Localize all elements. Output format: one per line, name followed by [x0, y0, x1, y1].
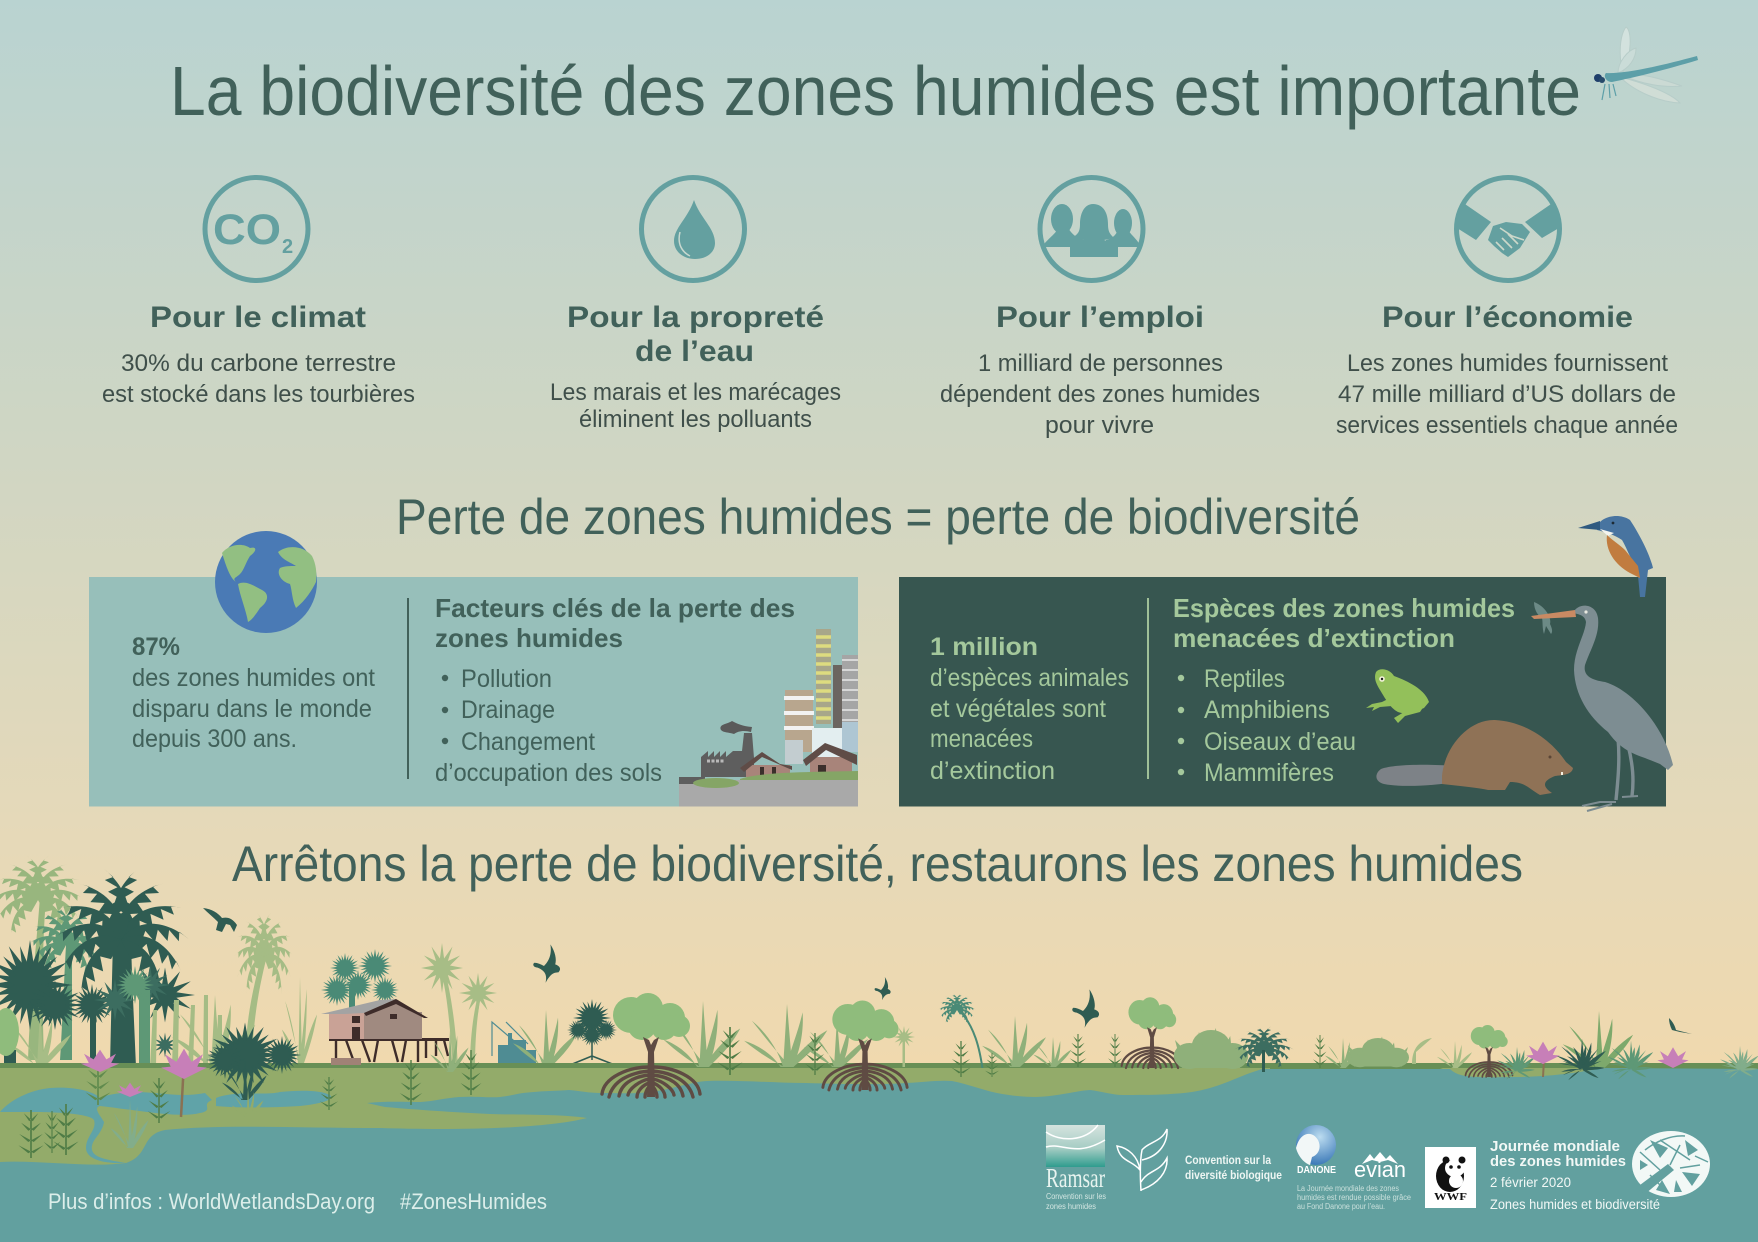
title: La biodiversité des zones humides est importante [170, 52, 1581, 130]
bullet list: Pollution [461, 665, 552, 693]
illustration: wetland landscape [0, 853, 1758, 1242]
panel: threatened species [899, 516, 1673, 811]
horizon plants, foreground [717, 1011, 1758, 1083]
text block: 30% du carbone terrestre [121, 350, 396, 377]
World Wetlands Day label: 2 février 2020 [1490, 1175, 1571, 1190]
bullet list: d’occupation des sols [435, 759, 662, 787]
statistic: des zones humides ont [132, 664, 375, 692]
bullet list: Mammifères [1204, 759, 1334, 787]
icon: CO2: CO [213, 206, 281, 254]
icon: water drop [642, 178, 744, 280]
far bushes and boat [492, 997, 620, 1067]
logo: Danone and evian: evian [1354, 1157, 1406, 1182]
tall palm trees, left [0, 853, 255, 1080]
far-left tree [0, 1008, 32, 1095]
heading: menacées d’extinction [1173, 623, 1455, 653]
footer link: Plus d’infos : WorldWetlandsDay.org [48, 1189, 375, 1214]
logo: Danone and evian: DANONE [1297, 1165, 1336, 1176]
flying birds [203, 908, 1692, 1034]
text block: Les marais et les marécages [550, 379, 841, 406]
panel: climate [102, 178, 415, 408]
text block [940, 350, 1260, 439]
logo: Ramsar: zones humides [1046, 1201, 1096, 1211]
World Wetlands Day label [1490, 1138, 1660, 1212]
World Wetlands Day label: des zones humides [1490, 1153, 1626, 1170]
text block: 47 mille milliard d’US dollars de [1338, 381, 1676, 408]
second land spit [1440, 1068, 1620, 1082]
statistic [132, 633, 375, 753]
heading [567, 301, 824, 368]
text block [102, 350, 415, 408]
World Wetlands Day label: Journée mondiale [1490, 1138, 1620, 1155]
icon: CO2 [205, 178, 308, 280]
heading: Facteurs clés de la perte des [435, 593, 795, 623]
heading: Pour la propreté [567, 301, 824, 334]
bullet list: Drainage [461, 696, 555, 724]
text: CBD: Convention sur la [1185, 1153, 1271, 1167]
divider [1147, 598, 1149, 779]
logo: Danone and evian: humides est rendue possible grâce [1297, 1193, 1412, 1202]
fan palms behind house [282, 947, 400, 1067]
icon: handshake [1456, 178, 1560, 280]
logo: Ramsar: Convention sur les [1046, 1191, 1106, 1201]
icon: CO2: 2 [282, 236, 293, 258]
text block [550, 379, 841, 433]
stilt house [321, 999, 449, 1065]
statistic: depuis 300 ans. [132, 725, 297, 753]
text block [1336, 350, 1678, 439]
text block: est stocké dans les tourbières [102, 381, 415, 408]
statistic: d’extinction [930, 757, 1055, 785]
divider [407, 598, 409, 779]
heading: zones humides [435, 623, 623, 653]
logo: Ramsar [1046, 1125, 1106, 1211]
left lagoon and stream [0, 1088, 212, 1163]
heading [435, 593, 795, 653]
horizon plants, centre [663, 992, 1072, 1072]
bullet list: Changement [461, 728, 595, 756]
logo: WWF: WWF [1434, 1191, 1467, 1203]
statistic: et végétales sont [930, 695, 1106, 723]
panel: key factors [89, 531, 858, 806]
heading: de l’eau [635, 335, 754, 368]
heading: Pour l’emploi [996, 301, 1204, 334]
statistic: 87% [132, 633, 180, 661]
illustration: city and factory [679, 629, 858, 806]
icon: people [1040, 178, 1143, 280]
horizon band [0, 1063, 1758, 1070]
statistic: disparu dans le monde [132, 695, 372, 723]
statistic: 1 million [930, 633, 1038, 661]
bullet list [1178, 665, 1356, 787]
mid lagoon [216, 1091, 331, 1108]
logo: Danone and evian: La Journée mondiale des zones [1297, 1184, 1399, 1193]
heading: wetland loss: Perte de zones humides = perte de biodiversité [396, 489, 1360, 545]
statistic [930, 633, 1129, 785]
logo: WWF [1425, 1147, 1476, 1208]
bullet list: Oiseaux d’eau [1204, 728, 1356, 756]
text block: éliminent les polluants [579, 406, 812, 433]
illustration: heron with fish [1531, 602, 1673, 811]
logo: Danone and evian [1296, 1125, 1412, 1211]
panel: clean water [550, 178, 841, 433]
illustration: beaver [1376, 720, 1573, 795]
hashtag: #ZonesHumides [400, 1189, 547, 1214]
text block: services essentiels chaque année [1336, 412, 1678, 439]
heading: Espèces des zones humides [1173, 593, 1515, 623]
panel: jobs [940, 178, 1260, 439]
logo: Danone and evian: au Fond Danone pour l’eau. [1297, 1202, 1385, 1211]
mangrove trees [602, 993, 1513, 1097]
heading: call to action: Arrêtons la perte de biodiversité, restaurons les zones humides [232, 836, 1523, 892]
heading: Pour l’économie [1382, 301, 1633, 334]
statistic: d’espèces animales [930, 664, 1129, 692]
bullet list: Reptiles [1204, 665, 1285, 693]
emblem [1632, 1131, 1710, 1197]
illustration: frog [1366, 669, 1429, 723]
illustration: kingfisher [1578, 516, 1653, 597]
land [0, 1068, 1270, 1180]
text block: 1 milliard de personnes [978, 350, 1223, 377]
logo: CBD leaves [1117, 1129, 1167, 1191]
coconut palm [234, 910, 294, 1067]
dark bush and foreground, left [18, 1019, 482, 1158]
star palms [421, 943, 497, 1067]
text block: pour vivre [1045, 412, 1154, 439]
text block: dépendent des zones humides [940, 381, 1260, 408]
bullet list [435, 665, 662, 787]
panel: economy [1336, 178, 1678, 439]
statistic: menacées [930, 725, 1033, 753]
heading: Pour le climat [150, 301, 366, 334]
logo: Ramsar: Ramsar [1046, 1163, 1105, 1193]
bullet list: Amphibiens [1204, 696, 1330, 724]
heading [1173, 593, 1515, 653]
bamboo [150, 995, 222, 1067]
World Wetlands Day label: Zones humides et biodiversité [1490, 1197, 1660, 1212]
text: CBD: diversité biologique [1185, 1168, 1282, 1182]
text: CBD [1185, 1153, 1282, 1182]
icon: dragonfly [1594, 27, 1698, 103]
text block: Les zones humides fournissent [1347, 350, 1668, 377]
icon: globe [215, 531, 317, 633]
water [0, 1068, 1758, 1242]
